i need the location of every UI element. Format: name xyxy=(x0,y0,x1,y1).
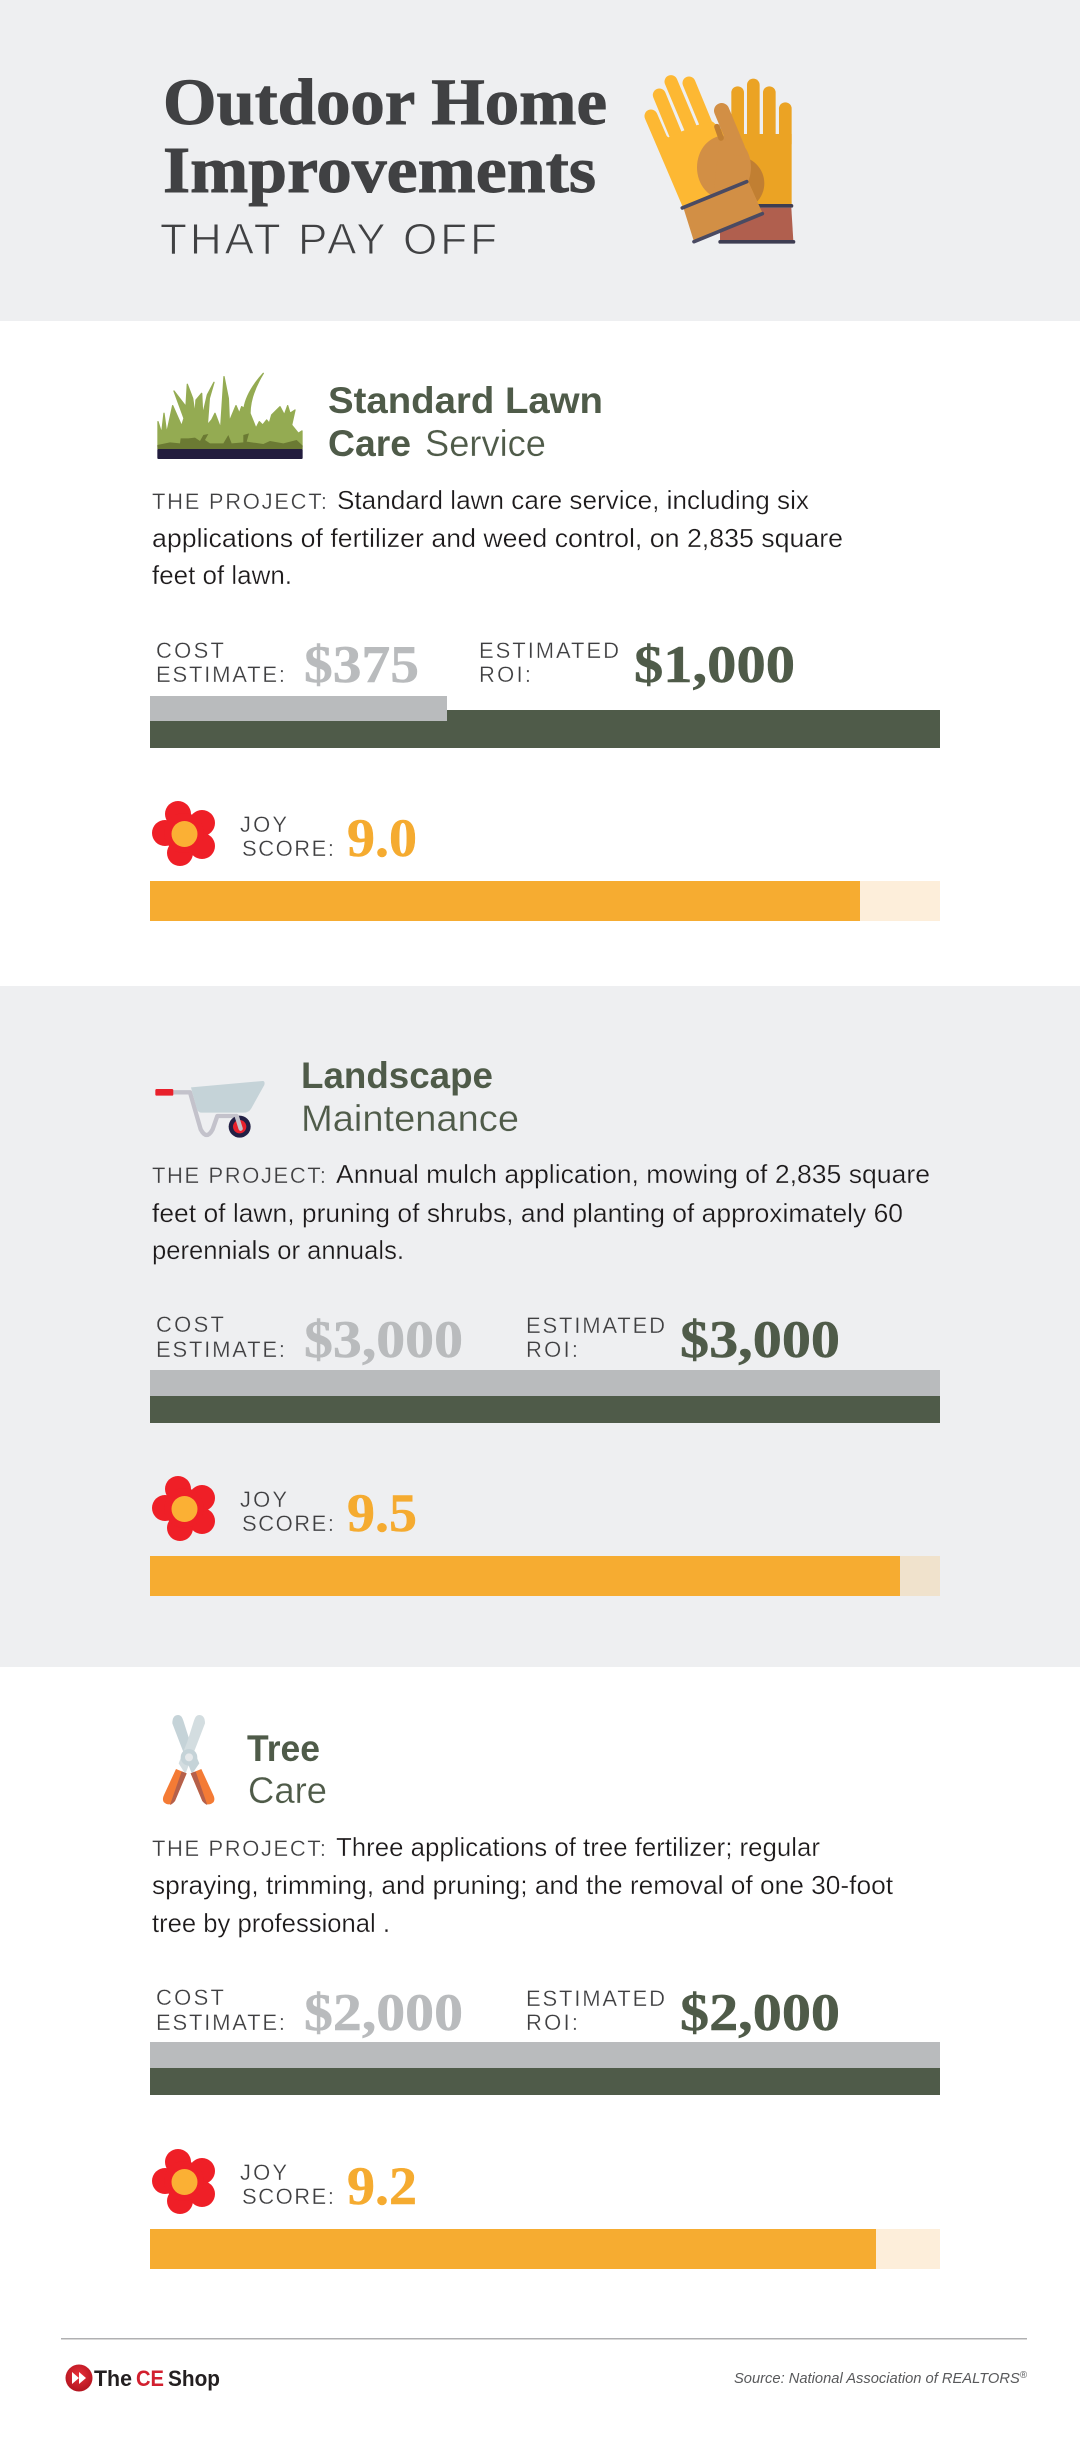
panel: standard lawn care service xyxy=(0,321,1080,986)
project description xyxy=(152,1159,930,1265)
estimated roi: $3,000 xyxy=(680,1311,840,1369)
bar chart: cost vs roi xyxy=(150,696,940,748)
estimated roi: ROI: xyxy=(479,662,531,687)
estimated roi: ESTIMATED xyxy=(526,1986,665,2011)
estimated roi: ROI: xyxy=(526,2010,578,2035)
heading: Service xyxy=(425,423,546,464)
joy score: SCORE: xyxy=(242,2184,334,2209)
project description: THE PROJECT: xyxy=(152,489,327,514)
cost estimate xyxy=(156,636,419,694)
source note: ® xyxy=(1020,2370,1028,2381)
joy score: 9.2 xyxy=(347,2156,417,2216)
panel: tree care xyxy=(0,1667,1080,2442)
project description: feet of lawn. xyxy=(152,560,292,590)
cost estimate: $2,000 xyxy=(304,1984,463,2042)
bar chart: cost vs roi xyxy=(150,2042,940,2095)
project description: perennials or annuals. xyxy=(152,1235,404,1265)
icon: pruning shears xyxy=(163,1715,214,1805)
joy score xyxy=(240,1483,417,1543)
panel: header xyxy=(0,0,1080,321)
project description: applications of fertilizer and weed control, on 2,835 square xyxy=(152,523,843,553)
project description: feet of lawn, pruning of shrubs, and planting of approximately 60 xyxy=(152,1198,903,1228)
source note: Source: National Association of REALTORS xyxy=(734,2370,1026,2387)
icon: flower xyxy=(152,1476,215,1541)
estimated roi: ROI: xyxy=(526,1337,578,1362)
cost estimate: COST xyxy=(156,1985,224,2010)
cost estimate: ESTIMATE: xyxy=(156,662,285,687)
heading: Standard Lawn xyxy=(328,380,603,421)
icon: flower xyxy=(152,2149,215,2214)
heading: Landscape xyxy=(301,1055,493,1096)
project description: tree by professional . xyxy=(152,1908,390,1938)
heading: Maintenance xyxy=(301,1098,519,1139)
logo: The CE Shop: CE xyxy=(136,2366,164,2391)
bar chart: joy score xyxy=(150,1556,940,1596)
project description: THE PROJECT: xyxy=(152,1836,326,1861)
cost estimate: ESTIMATE: xyxy=(156,1337,285,1362)
project description xyxy=(152,485,843,590)
cost estimate xyxy=(156,1984,463,2042)
footer xyxy=(61,2338,1028,2392)
joy score: JOY xyxy=(240,2160,287,2185)
project description: spraying, trimming, and pruning; and the removal of one 30-foot xyxy=(152,1870,894,1900)
logo: The CE Shop: Shop xyxy=(168,2366,220,2391)
heading xyxy=(301,1055,519,1139)
heading xyxy=(247,1728,327,1811)
joy score xyxy=(240,2156,417,2216)
title: Outdoor Home Improvements xyxy=(163,66,607,207)
heading: Care xyxy=(328,423,411,464)
estimated roi: $1,000 xyxy=(634,636,795,694)
cost estimate: ESTIMATE: xyxy=(156,2010,285,2035)
joy score: SCORE: xyxy=(242,1511,334,1536)
heading xyxy=(328,380,603,464)
project description: THE PROJECT: xyxy=(152,1163,326,1188)
project description: Annual mulch application, mowing of 2,835 square xyxy=(336,1159,930,1189)
subtitle: THAT PAY OFF xyxy=(160,215,497,264)
logo: The CE Shop: The xyxy=(94,2366,132,2391)
icon: wheelbarrow xyxy=(155,1081,265,1138)
bar chart: cost vs roi xyxy=(150,1370,940,1423)
project description: Three applications of tree fertilizer; regular xyxy=(336,1832,820,1862)
joy score: 9.0 xyxy=(347,808,417,868)
panel: landscape maintenance xyxy=(0,986,1080,1667)
joy score xyxy=(240,808,417,868)
heading: Tree xyxy=(247,1728,320,1769)
joy score: JOY xyxy=(240,812,287,837)
project description: Standard lawn care service, including six xyxy=(337,485,809,515)
title: Outdoor Home Improvements: Outdoor Home xyxy=(163,66,607,139)
title: Outdoor Home Improvements: Improvements xyxy=(163,134,596,207)
cost estimate: COST xyxy=(156,638,224,663)
icon: flower xyxy=(152,801,215,866)
joy score: 9.5 xyxy=(347,1483,417,1543)
joy score: SCORE: xyxy=(242,836,334,861)
estimated roi xyxy=(526,1984,840,2042)
cost estimate: COST xyxy=(156,1312,224,1337)
icon: grass xyxy=(157,373,303,459)
estimated roi xyxy=(479,636,795,694)
heading: Care xyxy=(248,1770,327,1811)
estimated roi: $2,000 xyxy=(680,1984,840,2042)
cost estimate: $375 xyxy=(304,636,419,694)
bar chart: joy score xyxy=(150,2229,940,2269)
cost estimate xyxy=(156,1311,463,1369)
joy score: JOY xyxy=(240,1487,287,1512)
bar chart: joy score xyxy=(150,881,940,921)
estimated roi xyxy=(526,1311,840,1369)
logo: The CE Shop xyxy=(66,2364,220,2392)
cost estimate: $3,000 xyxy=(304,1311,463,1369)
icon: gardening gloves xyxy=(645,82,795,244)
estimated roi: ESTIMATED xyxy=(526,1313,665,1338)
project description xyxy=(152,1832,894,1938)
estimated roi: ESTIMATED xyxy=(479,638,619,663)
